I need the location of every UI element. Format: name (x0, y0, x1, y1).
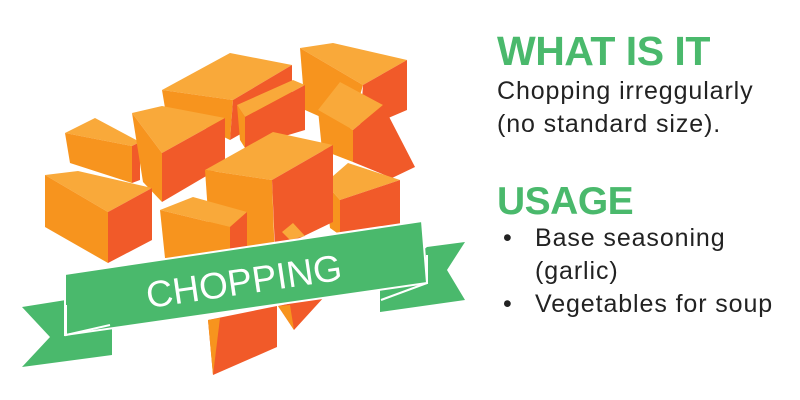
cube: center big (205, 132, 333, 262)
cube: center lower left (160, 197, 247, 262)
cube: right lower (325, 163, 400, 235)
heading: what is it: WHAT IS IT (497, 28, 710, 74)
cube: top center (162, 53, 292, 140)
cube: tilted right (318, 82, 415, 178)
list: usage: • (503, 224, 513, 252)
list: usage: • (503, 290, 513, 318)
list: usage: (garlic) (535, 257, 619, 285)
ribbon (22, 221, 465, 367)
cube: left middle (132, 106, 225, 202)
list: usage: Vegetables for soup (535, 290, 773, 318)
text: definition (497, 77, 754, 138)
cube: left bottom (45, 171, 152, 263)
list: usage: Base seasoning (535, 224, 726, 252)
text: definition: (no standard size). (497, 110, 721, 138)
cube: top right (300, 43, 407, 130)
cube: small left (65, 118, 140, 183)
cubes: below ribbon (208, 296, 325, 375)
ribbon label: CHOPPING (143, 247, 345, 316)
cube: upper middle (237, 80, 305, 148)
illustration: chopped cubes with ribbon (22, 43, 465, 375)
text: definition: Chopping irreggularly (497, 77, 754, 105)
cube: peeking (282, 223, 305, 240)
list: usage (503, 224, 773, 318)
heading: usage: USAGE (497, 180, 633, 223)
